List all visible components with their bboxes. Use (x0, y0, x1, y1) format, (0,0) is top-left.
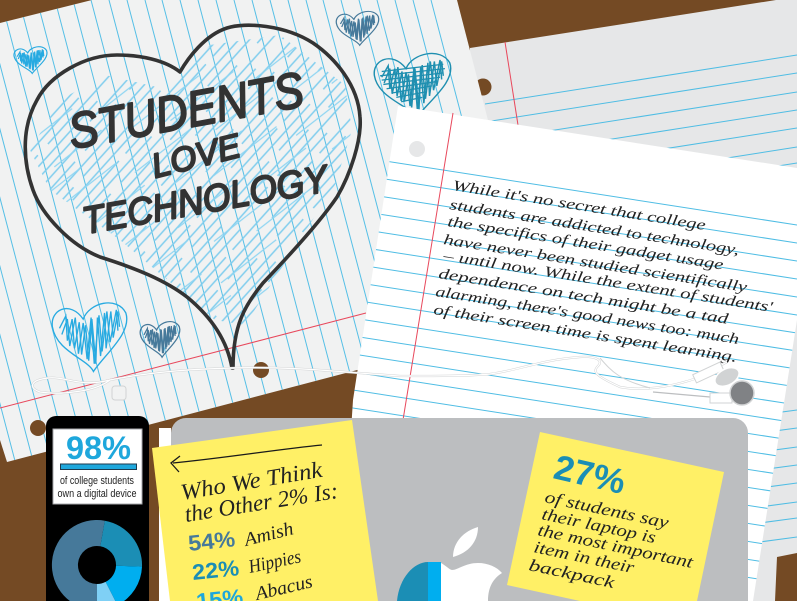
text block: intro handwriting: the specifics of their gadget usage (446, 214, 725, 274)
title: STUDENTS (64, 61, 308, 160)
stat list: 22% (191, 555, 240, 585)
stat list: Amish (240, 518, 296, 551)
text block: laptop stat: item in their (532, 537, 636, 577)
stat list: 54% (187, 526, 236, 556)
text block: intro handwriting: alarming, there's good news too: much (434, 284, 740, 348)
text block: laptop stat: their laptop is (540, 504, 658, 547)
icon: apple logo (397, 527, 502, 601)
text block: laptop stat: of students say (543, 487, 671, 532)
text block: intro handwriting: have never been studied scientifically (442, 232, 749, 296)
icon: big hand-drawn heart (25, 25, 360, 368)
chart: blue scribble fill inside big heart (30, 36, 351, 324)
stat screen: 98%: 98% (66, 430, 131, 466)
icon: slate heart bottom (140, 322, 180, 357)
heading: the Other 2% Is: (183, 478, 340, 527)
stat screen: 98%: own a digital device (58, 488, 136, 500)
icon: small blue heart top left (14, 47, 47, 73)
panel: front white notebook paper (340, 106, 797, 601)
panel: back grey notebook paper (470, 0, 797, 601)
icon: blue heart bottom left (52, 303, 127, 371)
title (64, 61, 333, 243)
text block: laptop stat (527, 487, 696, 592)
text block: intro handwriting: – until now. While the extent of students' (441, 248, 775, 316)
icon: small slate heart top (336, 11, 379, 45)
heading (179, 457, 340, 527)
text block: intro handwriting: While it's no secret that college (451, 178, 707, 234)
panel: iPod (46, 416, 149, 601)
text block: intro handwriting: students are addicted to technology, (448, 197, 740, 259)
panel: heart notebook paper (0, 0, 488, 462)
text block: intro handwriting: of their screen time is spent learning. (432, 302, 738, 366)
text block: intro handwriting: dependence on tech might be a tad (437, 266, 730, 328)
text block: intro handwriting (432, 178, 775, 366)
stat list: Hippies (246, 546, 303, 578)
icon: teal heart top right (374, 53, 451, 118)
stat screen: 98% (53, 429, 142, 504)
text block: laptop stat: backpack (527, 555, 617, 592)
title: TECHNOLOGY (79, 158, 333, 243)
decorative white paper strip (159, 428, 171, 601)
arrow (171, 445, 322, 472)
text block: laptop stat: the most important (536, 520, 696, 572)
title: LOVE (148, 127, 245, 186)
heading: Who We Think (179, 457, 325, 505)
stat: 27%: 27% (550, 448, 629, 502)
panel: laptop lid (171, 418, 748, 601)
stat screen: 98%: of college students (60, 475, 134, 487)
panel: sticky note 27% (507, 432, 724, 601)
icon: earbud cable and earbuds (32, 357, 754, 405)
stat list (187, 518, 315, 601)
panel: sticky note who we think (152, 420, 378, 601)
chart: donut (52, 520, 142, 601)
